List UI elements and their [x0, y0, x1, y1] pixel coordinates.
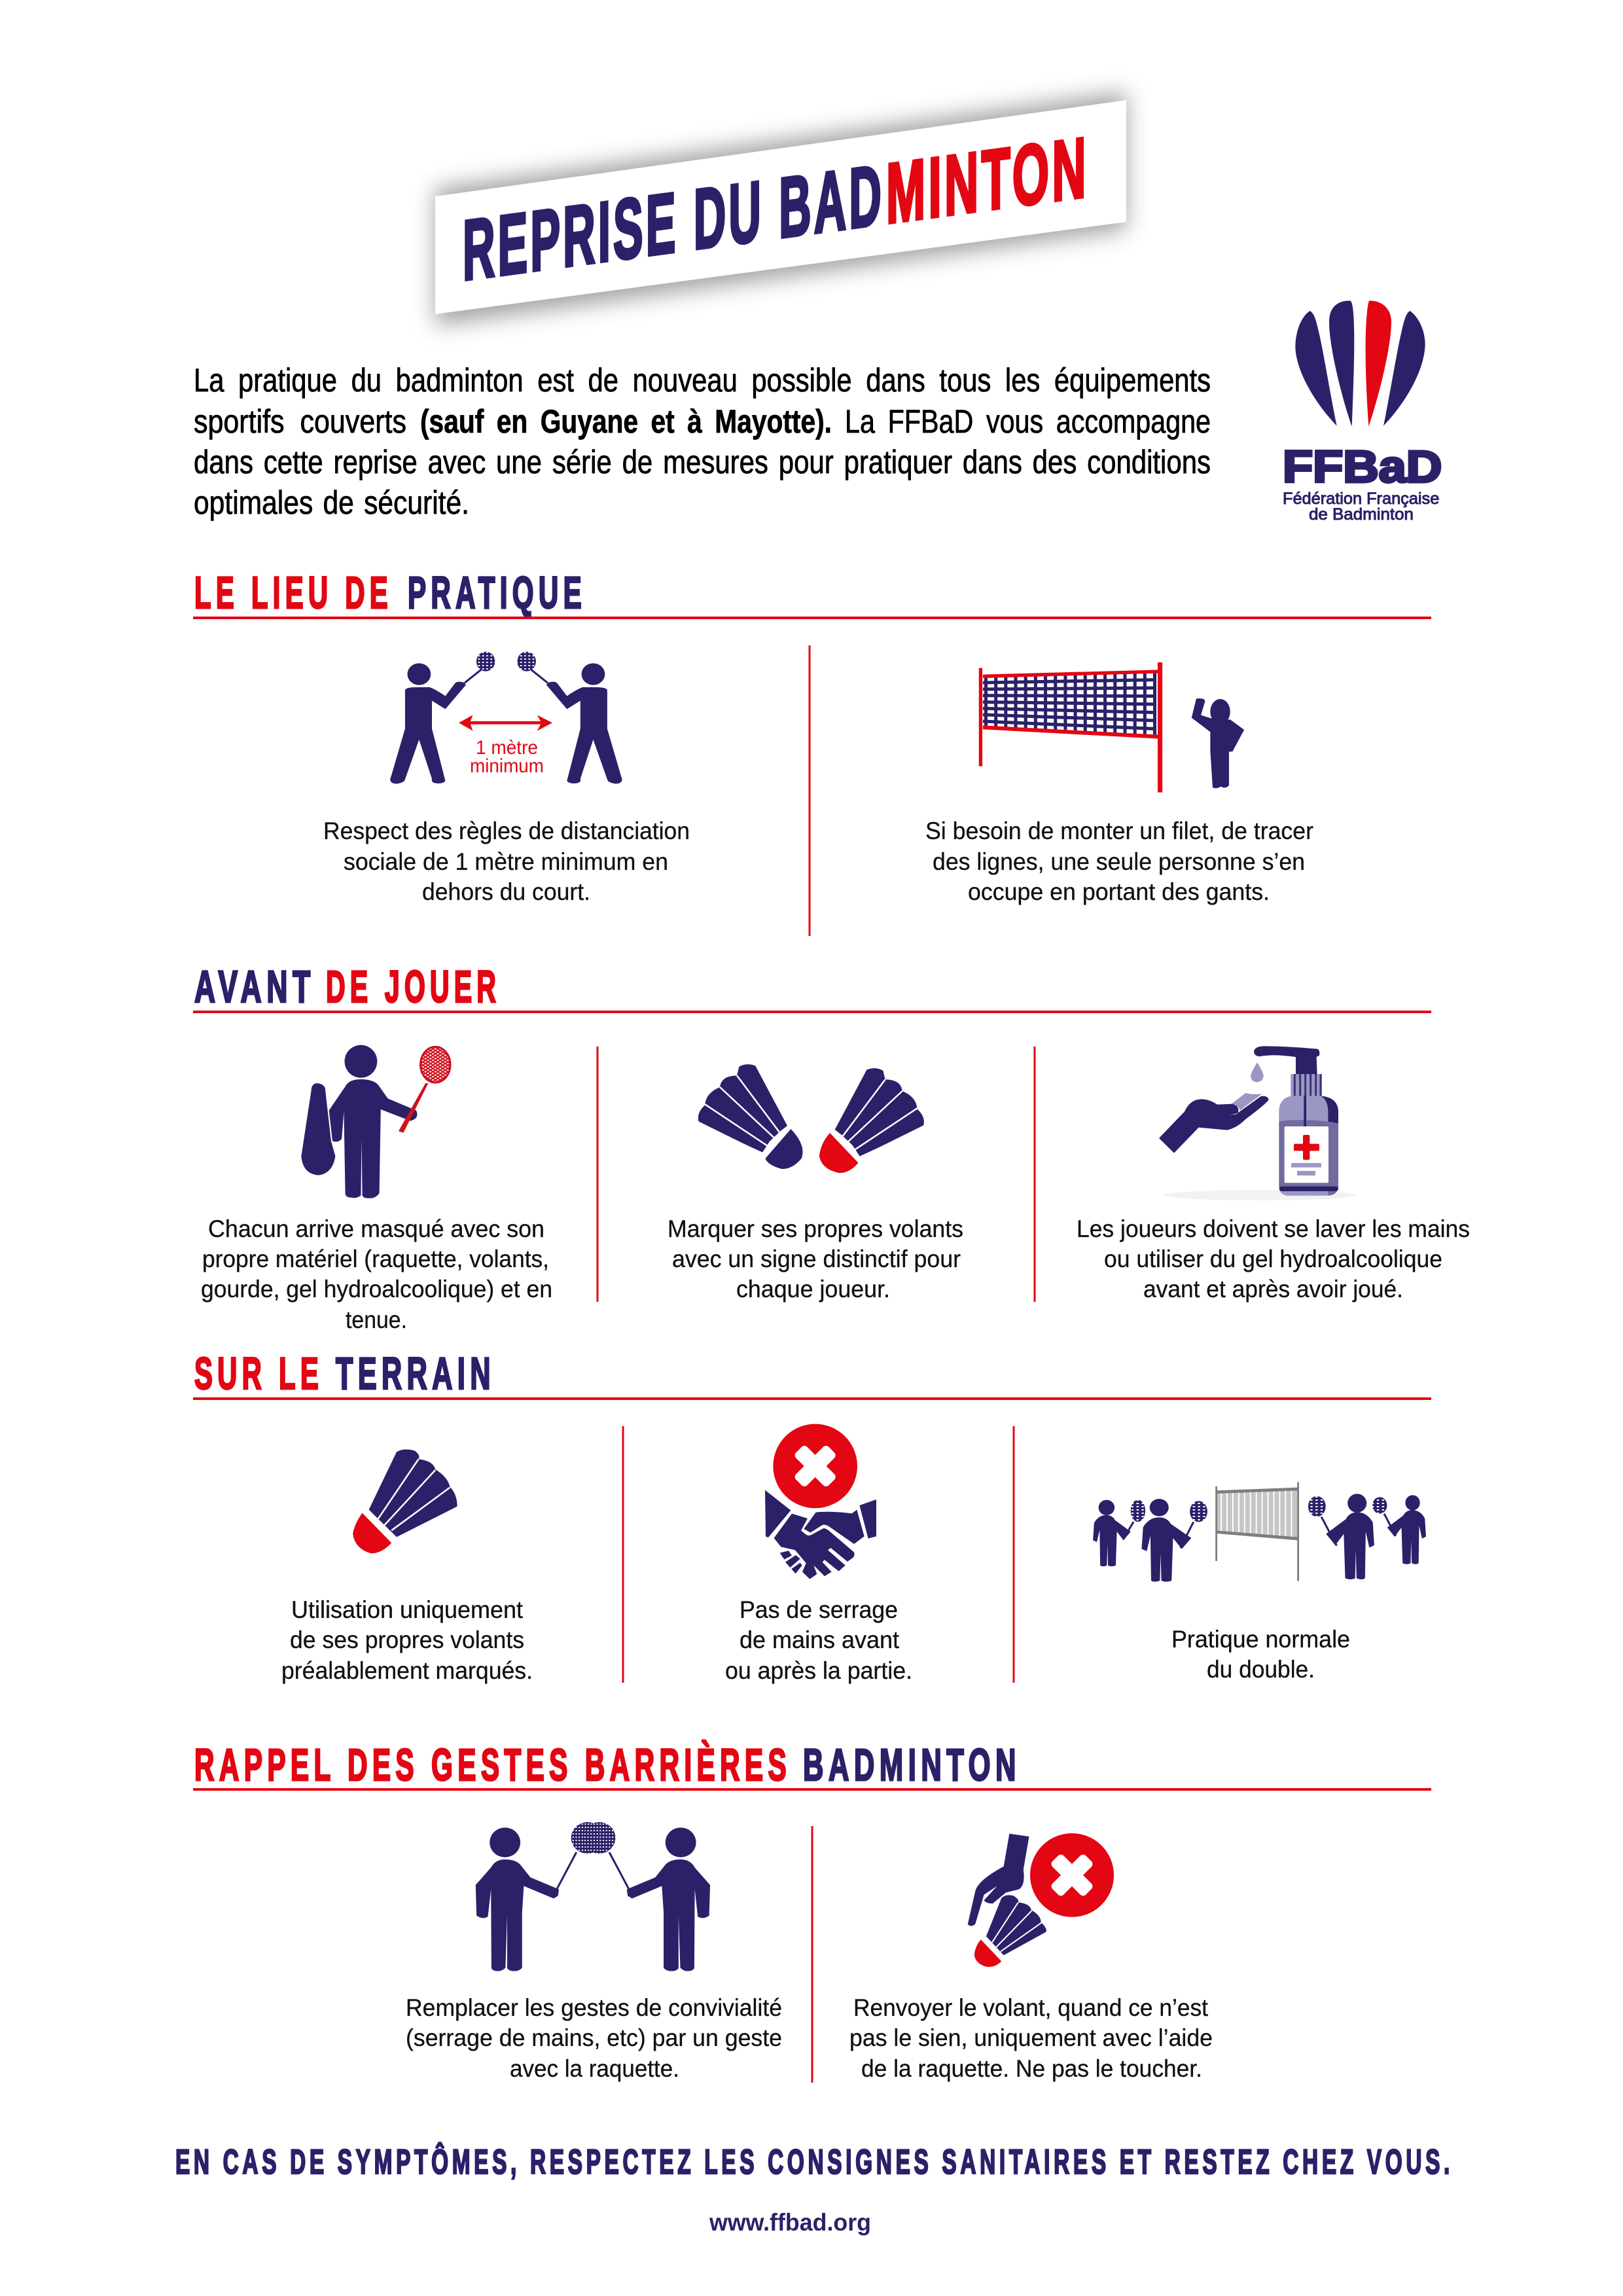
website: www.ffbad.org: [709, 2209, 871, 2236]
heading: rappel des gestes barrieres badminton: RAPPEL DES GESTES BARRIÈRES: [194, 1740, 791, 1790]
caption: volants: [668, 1215, 963, 1302]
caption: volants: Marquer ses propres volants: [668, 1215, 963, 1242]
icon: do not touch shuttlecock: [968, 1833, 1114, 1967]
caption: renvoyer le volant: pas le sien, uniquement avec l’aide: [849, 2024, 1213, 2051]
caption: propres volants: de ses propres volants: [290, 1626, 524, 1653]
heading: sur le terrain: [193, 1348, 1431, 1400]
heading: avant de jouer: AVANT: [194, 961, 315, 1012]
caption: convivialite: avec la raquette.: [510, 2055, 679, 2082]
caption: filet: des lignes, une seule personne s’en: [933, 848, 1305, 875]
caption: propres volants: [281, 1596, 533, 1684]
intro paragraph: La pratique du badminton est de nouveau possible dans tous les équipements: [194, 362, 1211, 399]
icon: doubles players and net: [1093, 1482, 1426, 1582]
caption: serrage de mains: ou après la partie.: [725, 1657, 912, 1684]
heading: le lieu de pratique: LE LIEU DE: [194, 567, 393, 618]
caption: double: [1171, 1626, 1350, 1683]
caption: double: Pratique normale: [1171, 1626, 1350, 1653]
caption: renvoyer le volant: Renvoyer le volant, quand ce n’est: [853, 1994, 1209, 2021]
label: 1 metre minimum: 1 mètre: [476, 737, 538, 759]
caption: distanciation: Respect des règles de distanciation: [323, 817, 690, 844]
caption: distanciation: sociale de 1 mètre minimum en: [344, 848, 668, 875]
FFBaD logo: [1283, 300, 1442, 524]
FFBaD logo: FFBaD: [1283, 442, 1442, 492]
icon: masked player with bag and racket: [301, 1045, 450, 1198]
icon: net and person: [979, 662, 1244, 793]
title banner: MINTON: [886, 119, 1089, 242]
caption: materiel: gourde, gel hydroalcoolique) et en: [201, 1276, 552, 1302]
caption: lavage des mains: Les joueurs doivent se laver les mains: [1077, 1215, 1470, 1242]
FFBaD logo: Fédération Française: [1283, 490, 1439, 508]
caption: volants: avec un signe distinctif pour: [672, 1246, 961, 1272]
heading: le lieu de pratique: [193, 567, 1431, 619]
caption: lavage des mains: ou utiliser du gel hydroalcoolique: [1104, 1246, 1442, 1272]
icon: no handshake: [765, 1424, 876, 1579]
caption: distanciation: dehors du court.: [422, 878, 590, 905]
caption: filet: Si besoin de monter un filet, de tracer: [925, 817, 1313, 844]
intro paragraph: optimales de sécurité.: [194, 484, 469, 521]
caption: materiel: [201, 1215, 552, 1333]
icon: two players one metre apart: [390, 652, 622, 783]
FFBaD logo: de Badminton: [1309, 505, 1414, 524]
caption: serrage de mains: [725, 1596, 912, 1684]
intro paragraph: dans cette reprise avec une série de mesures pour pratiquer dans des conditions: [194, 444, 1211, 480]
caption: convivialite: [406, 1994, 782, 2082]
caption: filet: occupe en portant des gants.: [968, 878, 1270, 905]
caption: lavage des mains: avant et après avoir joué.: [1143, 1276, 1403, 1302]
caption: materiel: tenue.: [346, 1306, 407, 1333]
intro paragraph: [194, 362, 1211, 521]
intro paragraph: sportifs couverts: [194, 403, 406, 440]
caption: convivialite: (serrage de mains, etc) par un geste: [406, 2024, 782, 2051]
intro paragraph: La FFBaD vous accompagne: [845, 403, 1211, 440]
caption: volants: chaque joueur.: [736, 1276, 890, 1302]
caption: serrage de mains: de mains avant: [740, 1626, 900, 1653]
label: 1 metre minimum: [470, 737, 544, 777]
heading: rappel des gestes barrieres badminton: BADMINTON: [803, 1740, 1021, 1790]
label: 1 metre minimum: minimum: [470, 755, 544, 777]
caption: convivialite: Remplacer les gestes de convivialité: [406, 1994, 782, 2021]
intro paragraph: (sauf en Guyane et à Mayotte).: [420, 403, 832, 440]
caption: renvoyer le volant: de la raquette. Ne pas le toucher.: [861, 2055, 1202, 2082]
heading: sur le terrain: TERRAIN: [336, 1348, 495, 1399]
heading: sur le terrain: SUR LE: [194, 1348, 323, 1399]
caption: materiel: propre matériel (raquette, volants,: [202, 1246, 549, 1272]
icon: racket greeting: [476, 1822, 710, 1971]
caption: serrage de mains: Pas de serrage: [740, 1596, 898, 1623]
caption: renvoyer le volant: [849, 1994, 1213, 2082]
icon: single shuttlecock: [353, 1450, 457, 1553]
icon: hand and sanitizer gel: [1159, 1046, 1356, 1200]
caption: propres volants: préalablement marqués.: [281, 1657, 533, 1684]
heading: avant de jouer: [193, 961, 1431, 1013]
heading: avant de jouer: DE JOUER: [326, 961, 501, 1012]
icon: two marked shuttlecocks: [698, 1064, 924, 1173]
caption: lavage des mains: [1077, 1215, 1470, 1302]
caption: materiel: Chacun arrive masqué avec son: [208, 1215, 544, 1242]
caption: propres volants: Utilisation uniquement: [291, 1596, 524, 1623]
title banner: REPRISE DU BAD: [463, 147, 884, 298]
caption: double: du double.: [1207, 1656, 1315, 1683]
caption: distanciation: [323, 817, 690, 905]
heading: le lieu de pratique: PRATIQUE: [408, 567, 586, 618]
caption: filet: [925, 817, 1313, 905]
